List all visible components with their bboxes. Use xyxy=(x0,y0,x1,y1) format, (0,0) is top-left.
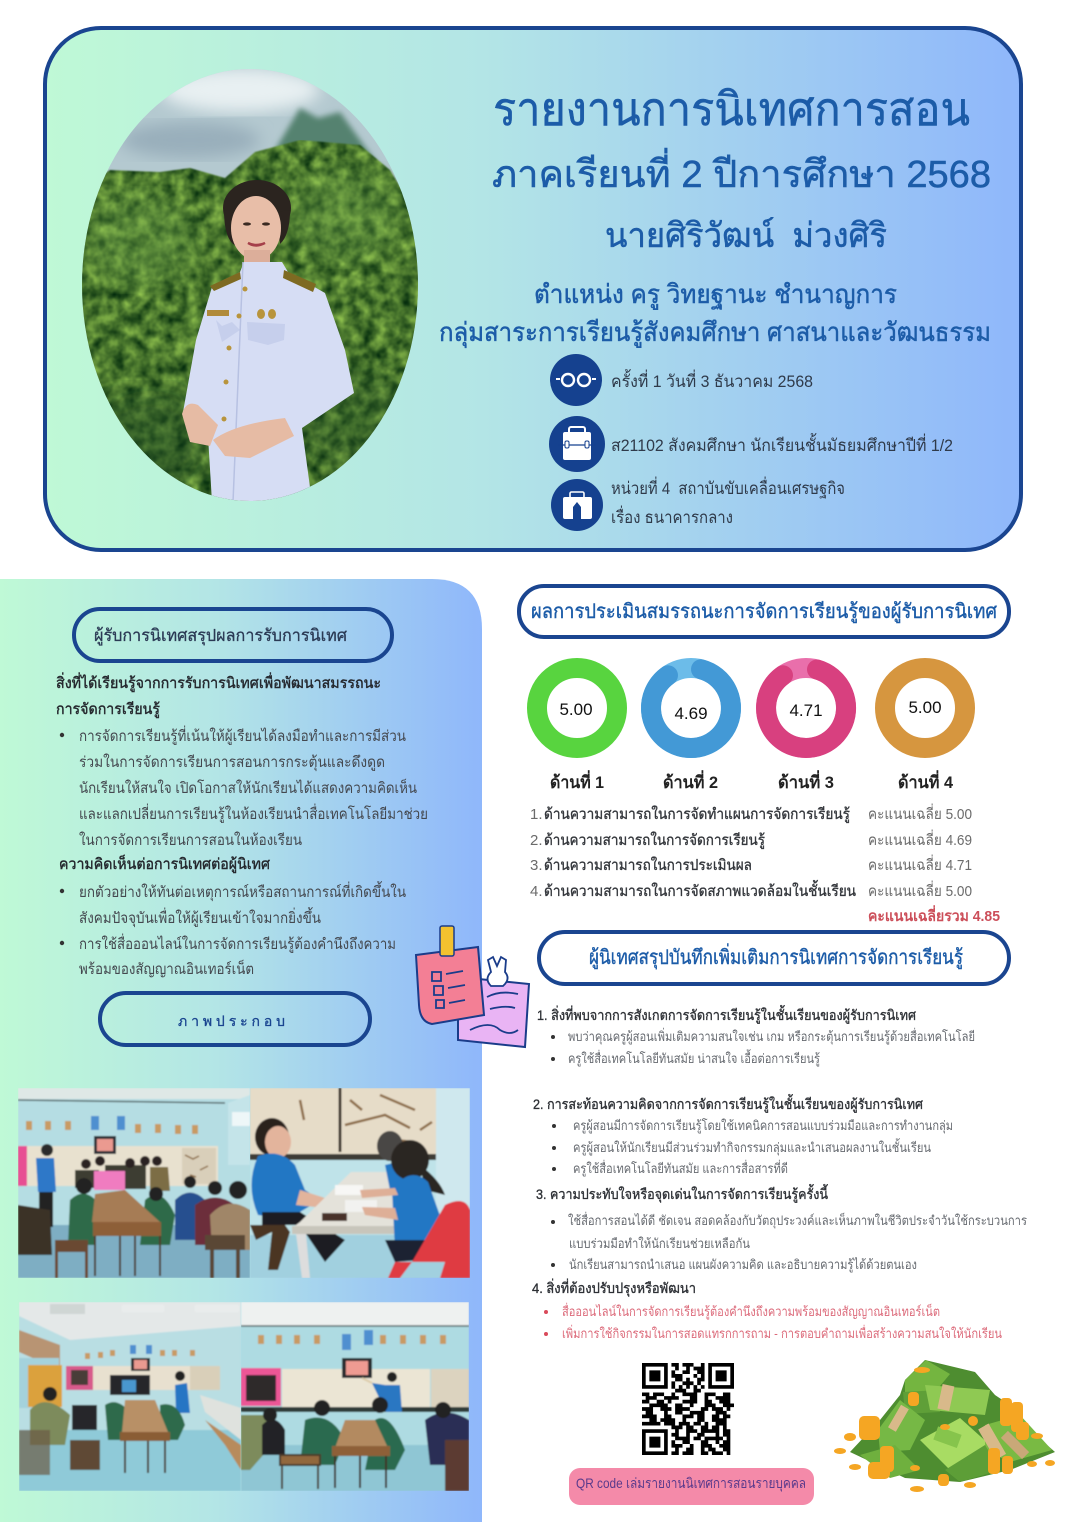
score list: คะแนนเฉลี่ย 5.00 xyxy=(868,880,972,900)
teacher name: นายศิริวัฒน์ ม่วงศิริ xyxy=(605,217,887,255)
text block: opinions on supervision xyxy=(59,854,406,978)
position: ตำแหน่ง ครู วิทยฐานะ ชำนาญการ xyxy=(534,279,897,310)
QR code caption: QR code เล่มรายงานนิเทศการสอนรายบุคคล xyxy=(576,1475,806,1492)
notes section 3: impressions: แบบร่วมมือทำให้นักเรียนช่วยเหลือกัน xyxy=(569,1236,750,1251)
score list: 2. xyxy=(530,832,543,849)
notes section 1: observations: ครูใช้สื่อเทคโนโลยีทันสมัย น่าสนใจ เอื้อต่อการเรียนรู้ xyxy=(568,1049,820,1067)
notes section 4: improvements: 4. สิ่งที่ต้องปรับปรุงหรือพัฒนา xyxy=(532,1279,696,1297)
score list xyxy=(530,803,1000,925)
chart: donut scores xyxy=(537,668,965,792)
heading pill: supervisor notes: ผู้นิเทศสรุปบันทึกเพิ่มเติมการนิเทศการจัดการเรียนรู้ xyxy=(589,943,963,970)
score list: ด้านความสามารถในการจัดการเรียนรู้ xyxy=(544,831,765,849)
score list: ด้านความสามารถในการจัดสภาพแวดล้อมในชั้นเรียน xyxy=(544,880,856,900)
heading pill: evaluation results xyxy=(519,586,1009,637)
photo: teacher at the board xyxy=(241,1302,469,1491)
icon: sticky notes illustration xyxy=(416,926,529,1047)
notes section 1: observations: พบว่าคุณครูผู้สอนเพิ่มเติมความสนใจเช่น เกม หรือกระตุ้นการเรียนรู้ด้วยสื่อเทคโนโลยี xyxy=(568,1028,975,1045)
donut 1 xyxy=(537,668,617,792)
donut 4 xyxy=(885,668,965,792)
person xyxy=(182,180,354,502)
notes section 3: impressions: 3. ความประทับใจหรือจุดเด่นในการจัดการเรียนรู้ครั้งนี้ xyxy=(536,1184,828,1203)
unit and topic xyxy=(611,476,845,527)
notes section 3: impressions xyxy=(536,1184,1027,1273)
heading pill: supervisee summary xyxy=(74,609,392,661)
notes section 1: observations xyxy=(537,1005,975,1067)
text block: opinions on supervision: การใช้สื่อออนไลน์ในการจัดการเรียนรู้ต้องคำนึงถึงความ xyxy=(79,933,396,953)
title: รายงานการนิเทศการสอน xyxy=(493,83,970,135)
donut 4: ด้านที่ 4 xyxy=(898,770,954,792)
text block: learning summary: การจัดการเรียนรู้ที่เน้นให้ผู้เรียนได้ลงมือทำและการมีส่วน xyxy=(79,725,406,745)
text block: learning summary: ร่วมในการจัดการเรียนการสอนการกระตุ้นและดึงดูด xyxy=(79,753,385,772)
icon: toolbox xyxy=(549,416,605,472)
notes section 2: reflections: ครูผู้สอนมีการจัดการเรียนรู้โดยใช้เทคนิคการสอนแบบร่วมมือและการทำงานกลุ่ม xyxy=(573,1118,953,1134)
heading pill: illustrations: ภาพประกอบ xyxy=(178,1013,285,1029)
notes section 4: improvements: เพิ่มการใช้กิจกรรมในการสอดแทรกการถาม - การตอบคำถามเพื่อสร้างความสนใจให้นักเรียน xyxy=(562,1325,1002,1341)
donut 4: 5.00 xyxy=(908,698,942,717)
photo: group presentation in classroom xyxy=(18,1088,250,1278)
text block: learning summary: ในการจัดการเรียนการสอนในห้องเรียน xyxy=(79,831,302,849)
notes section 2: reflections: ครูผู้สอนให้นักเรียนมีส่วนร่วมทำกิจกรรมกลุ่มและนำเสนอผลงานในชั้นเรียน xyxy=(573,1138,931,1156)
visit date: ครั้งที่ 1 วันที่ 3 ธันวาคม 2568 xyxy=(611,369,813,391)
notes section 1: observations: 1. สิ่งที่พบจากการสังเกตการจัดการเรียนรู้ในชั้นเรียนของผู้รับการนิเทศ xyxy=(537,1005,916,1024)
photo: group work wide view xyxy=(19,1302,241,1491)
donut 1: ด้านที่ 1 xyxy=(550,770,604,792)
portrait photo xyxy=(80,65,420,505)
heading pill: illustrations xyxy=(100,993,370,1045)
text block: opinions on supervision: ยกตัวอย่างให้ทันต่อเหตุการณ์หรือสถานการณ์ที่เกิดขึ้นใน xyxy=(79,881,406,902)
icon: glasses xyxy=(550,354,602,406)
notes section 3: impressions: นักเรียนสามารถนำเสนอ แผนผังความคิด และอธิบายความรู้ได้ด้วยตนเอง xyxy=(569,1257,917,1273)
unit and topic: หน่วยที่ 4 สถาบันขับเคลื่อนเศรษฐกิจ xyxy=(611,476,845,499)
QR code caption xyxy=(569,1468,814,1505)
text block: opinions on supervision: สังคมปัจจุบันเพื่อให้ผู้เรียนเข้าใจมากยิ่งขึ้น xyxy=(79,907,321,928)
text block: opinions on supervision: ความคิดเห็นต่อการนิเทศต่อผู้นิเทศ xyxy=(59,854,270,873)
score list: 1. xyxy=(530,806,543,823)
unit and topic: เรื่อง ธนาคารกลาง xyxy=(611,505,733,527)
heading pill: supervisee summary: ผู้รับการนิเทศสรุปผลการรับการนิเทศ xyxy=(94,626,347,646)
notes section 2: reflections xyxy=(533,1094,953,1177)
header panel xyxy=(45,28,1021,550)
score list: คะแนนเฉลี่ย 4.69 xyxy=(868,829,972,849)
donut 1: 5.00 xyxy=(559,700,593,719)
donut 2: 4.69 xyxy=(674,704,708,723)
score list: คะแนนเฉลี่ยรวม 4.85 xyxy=(868,905,1000,925)
score list: คะแนนเฉลี่ย 5.00 xyxy=(868,803,972,823)
donut 3 xyxy=(766,668,846,792)
score list: ด้านความสามารถในการจัดทำแผนการจัดการเรียนรู้ xyxy=(544,805,850,823)
heading pill: supervisor notes xyxy=(539,932,1009,984)
donut 2: ด้านที่ 2 xyxy=(663,770,718,792)
text block: learning summary: และแลกเปลี่ยนการเรียนรู้ในห้องเรียนนำสื่อเทคโนโลยีมาช่วย xyxy=(79,803,428,823)
text block: learning summary xyxy=(56,672,428,849)
subject group: กลุ่มสาระการเรียนรู้สังคมศึกษา ศาสนาและวัฒนธรรม xyxy=(439,317,991,348)
text block: learning summary: นักเรียนให้สนใจ เปิดโอกาสให้นักเรียนได้แสดงความคิดเห็น xyxy=(79,778,417,797)
donut 3: ด้านที่ 3 xyxy=(778,770,834,792)
score list: ด้านความสามารถในการประเมินผล xyxy=(544,856,752,874)
text block: learning summary: การจัดการเรียนรู้ xyxy=(56,701,160,718)
donut 3: 4.71 xyxy=(789,701,823,720)
score list: 3. xyxy=(530,857,543,874)
photo: supervision meeting xyxy=(250,1088,470,1278)
score list: 4. xyxy=(530,883,543,900)
course information: ส21102 สังคมศึกษา นักเรียนชั้นมัธยมศึกษาปีที่ 1/2 xyxy=(611,433,953,455)
QR code xyxy=(642,1363,734,1455)
text block: opinions on supervision: พร้อมของสัญญาณอินเทอร์เน็ต xyxy=(79,959,254,978)
notes section 2: reflections: ครูใช้สื่อเทคโนโลยีทันสมัย และการสื่อสารที่ดี xyxy=(573,1160,788,1177)
notes section 2: reflections: 2. การสะท้อนความคิดจากการจัดการเรียนรู้ในชั้นเรียนของผู้รับการนิเทศ xyxy=(533,1094,923,1113)
subtitle: ภาคเรียนที่ 2 ปีการศึกษา 2568 xyxy=(492,148,991,196)
panel: supervisee summary xyxy=(0,579,482,1522)
heading pill: evaluation results: ผลการประเมินสมรรถนะการจัดการเรียนรู้ของผู้รับการนิเทศ xyxy=(531,601,997,624)
illustration: pile of money and coins xyxy=(834,1360,1055,1492)
score list: คะแนนเฉลี่ย 4.71 xyxy=(868,854,972,874)
notes section 4: improvements xyxy=(532,1279,1002,1341)
notes section 4: improvements: สื่อออนไลน์ในการจัดการเรียนรู้ต้องคำนึงถึงความพร้อมของสัญญาณอินเทอร์เน็ต xyxy=(562,1302,940,1320)
donut 2 xyxy=(651,668,731,792)
icon: briefcase with pencil xyxy=(551,479,603,531)
text block: learning summary: สิ่งที่ได้เรียนรู้จากการรับการนิเทศเพื่อพัฒนาสมรรถนะ xyxy=(56,672,381,692)
